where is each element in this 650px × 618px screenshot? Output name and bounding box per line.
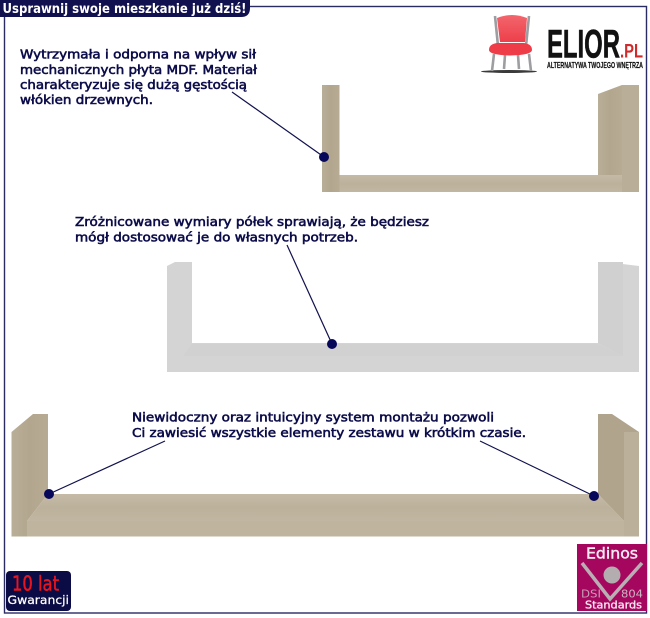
text block: Niewidoczny oraz intuicyjny system montażu pozwoli: [132, 410, 494, 424]
pointer: [287, 245, 337, 349]
text block: [20, 48, 258, 107]
shelf: oak top: [322, 85, 639, 192]
badge: Edinos DSI 804 Standards: Standards: [585, 598, 642, 612]
shelf: oak bottom: [12, 414, 639, 536]
callout: MDF material: [20, 48, 329, 162]
text block: włókien drzewnych.: [20, 93, 153, 107]
badge: Edinos DSI 804 Standards: 804: [621, 588, 643, 600]
logo: Elior.pl: [481, 15, 643, 73]
badge: Edinos DSI 804 Standards: DSI: [581, 588, 601, 600]
badge: Edinos DSI 804 Standards: Edinos: [586, 544, 638, 562]
text block: mógł dostosować je do własnych potrzeb.: [75, 230, 358, 244]
wordmark: .PL: [620, 42, 643, 62]
title banner: Usprawnij swoje mieszkanie już dziś!: [2, 2, 246, 17]
badge: 10 lat warranty: Gwarancji: [8, 593, 69, 607]
badge: Edinos DSI 804 Standards: [577, 544, 647, 612]
callout: mounting system: [44, 410, 599, 501]
text block: Wytrzymała i odporna na wpływ sił: [20, 48, 257, 62]
badge: 10 lat warranty: 10 lat: [12, 572, 59, 596]
callout: dimensions: [75, 215, 429, 349]
text block: [132, 410, 526, 440]
badge: 10 lat warranty: [6, 571, 71, 611]
pointer: [232, 92, 329, 162]
text block: Ci zawiesić wszystkie elementy zestawu w krótkim czasie.: [132, 426, 526, 440]
text block: mechanicznych płyta MDF. Materiał: [20, 63, 258, 77]
left pointer: [44, 441, 165, 499]
icon: red chair: [481, 15, 537, 73]
shelf: white middle: [167, 262, 639, 372]
text block: [75, 215, 429, 244]
text block: Zróżnicowane wymiary półek sprawiają, że będziesz: [75, 215, 429, 229]
text block: charakteryzuje się dużą gęstością: [20, 78, 247, 92]
right pointer: [480, 441, 599, 501]
